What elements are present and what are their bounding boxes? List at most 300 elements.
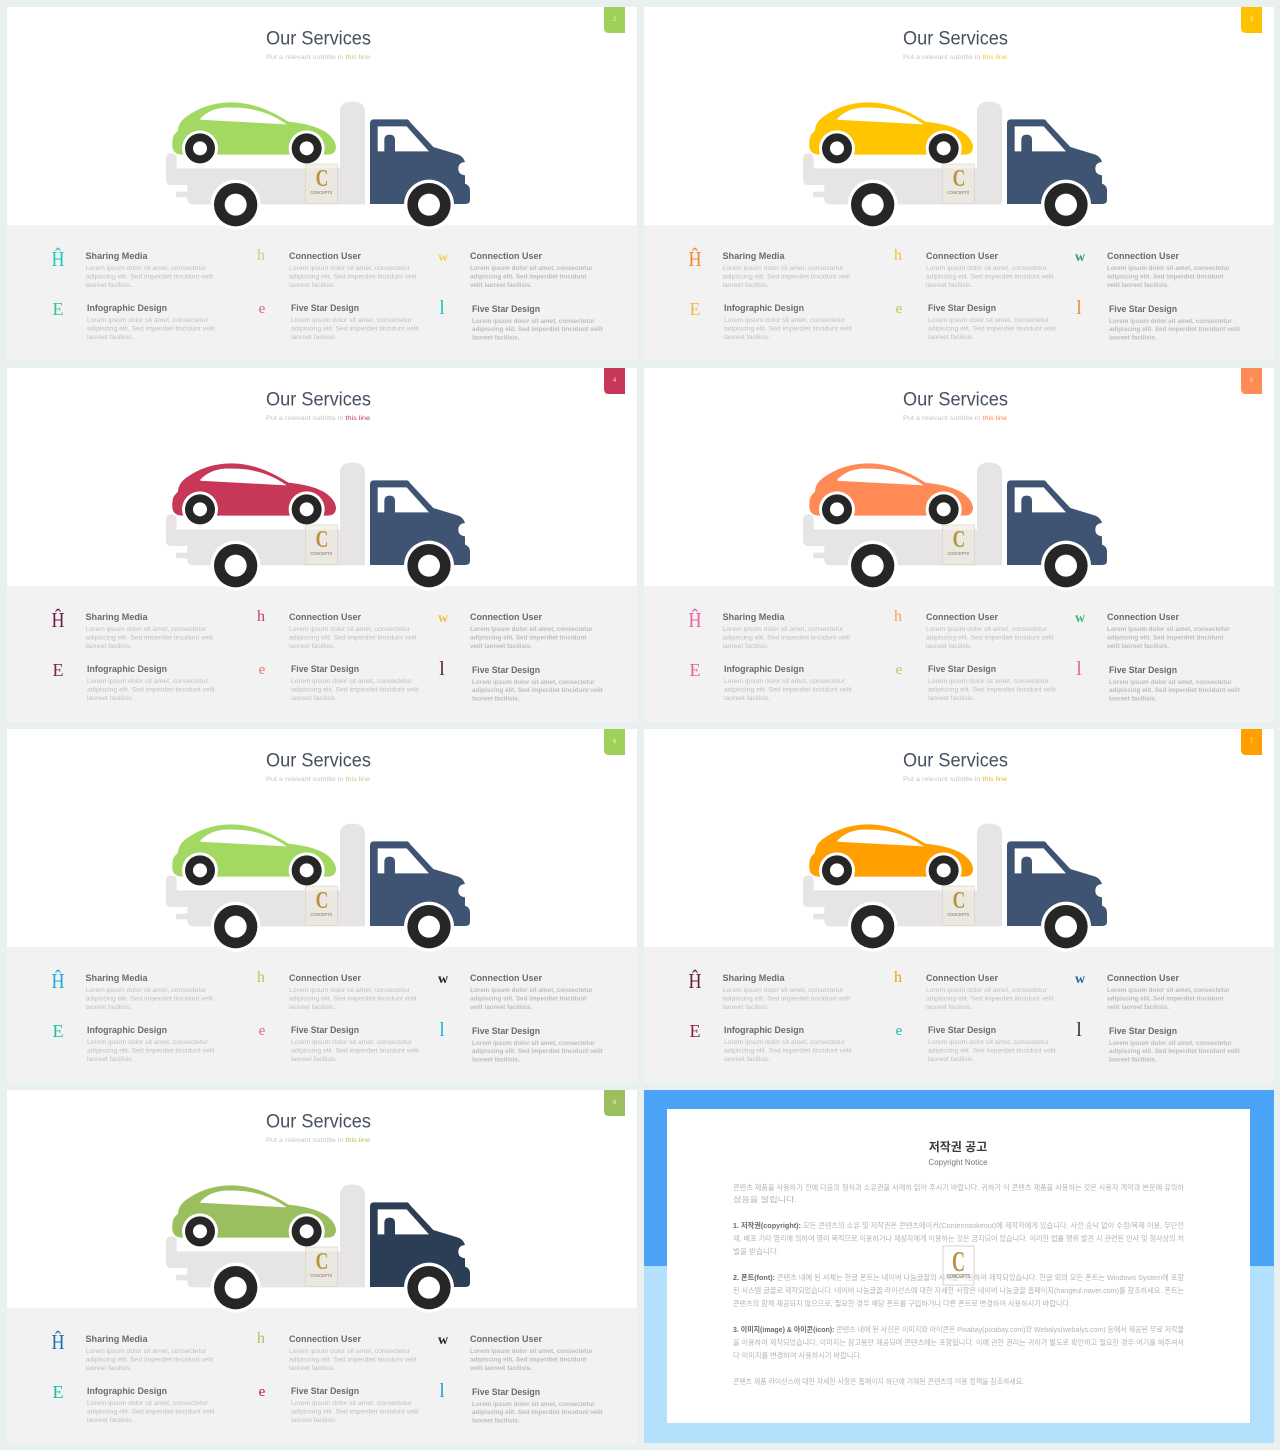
service: Connection User right: Lorem ipsum dolor sit amet, consectetur <box>470 265 593 272</box>
service: Connection User right: Lorem ipsum dolor sit amet, consectetur <box>1107 626 1230 633</box>
service: Connection User right: Lorem ipsum dolor sit amet, consectetur <box>1107 265 1230 272</box>
service: Sharing Media: Sharing Media <box>722 251 785 261</box>
service: Sharing Media: adipiscing elit. Sed imperdiet tincidunt velit <box>86 274 213 280</box>
service: Infographic Design: Infographic Design <box>87 1025 167 1035</box>
watermark logo <box>943 1246 974 1285</box>
service: Connection User: laoreet facilisis. <box>289 643 336 650</box>
page tab <box>1241 7 1262 33</box>
service: Sharing Media: laoreet facilisis. <box>722 643 769 650</box>
service: Connection User <box>257 608 417 650</box>
service: Connection User: h <box>894 247 902 264</box>
service: Sharing Media: Sharing Media <box>722 612 785 622</box>
tow truck illustration <box>803 463 1107 591</box>
notice body text: 된 시스템 글꼴로 제작되었습니다. 네이버 나눔글꼴 라이선스에 대한 자세한 사항은 네이버 나눔글꼴 홈페이지(hangeul.naver.com)를 참조하세요. 폰트는 <box>733 1285 1184 1295</box>
service: Sharing Media: Sharing Media <box>86 1334 148 1344</box>
service: Connection User right: adipiscing elit. Sed imperdiet tincidunt <box>1107 996 1224 1002</box>
service: Connection User: h <box>257 608 265 625</box>
service: Five Star Design right: l <box>1076 297 1082 319</box>
service: Five Star Design right: Lorem ipsum dolor sit amet, consectetur <box>1109 679 1232 686</box>
service: Infographic Design <box>52 1021 215 1063</box>
service: Sharing Media: adipiscing elit. Sed imperdiet tincidunt velit <box>722 634 850 642</box>
service: Connection User: Connection User <box>926 251 998 261</box>
service: Sharing Media: laoreet facilisis. <box>86 643 132 650</box>
service: Connection User right: Lorem ipsum dolor sit amet, consectetur <box>470 1348 593 1355</box>
service: Five Star Design: laoreet facilisis. <box>291 695 338 702</box>
service: Connection User right: velit laoreet facilisis. <box>470 643 532 650</box>
service: Connection User: h <box>257 1330 265 1347</box>
service: Sharing Media: Sharing Media <box>86 251 148 261</box>
service: Connection User: Connection User <box>926 612 998 622</box>
tow truck illustration: C <box>316 527 328 553</box>
service: Five Star Design right <box>1076 297 1241 342</box>
tow truck illustration <box>166 463 470 591</box>
service: Sharing Media: laoreet facilisis. <box>722 1004 769 1011</box>
service: Sharing Media: Lorem ipsum dolor sit amet, consectetur <box>722 626 844 633</box>
service: Infographic Design <box>52 660 215 702</box>
service: Sharing Media: Ĥ <box>52 247 64 271</box>
service: Connection User: laoreet facilisis. <box>926 1004 973 1011</box>
service: Connection User right: Connection User <box>470 612 542 622</box>
notice body text: 셨음을 알립니다. <box>733 1195 797 1204</box>
page tab <box>1241 368 1262 394</box>
service: Connection User: Connection User <box>289 612 361 622</box>
service: Connection User: Connection User <box>289 1334 361 1344</box>
service: Sharing Media: laoreet facilisis. <box>722 282 769 289</box>
page tab: 6 <box>613 739 617 745</box>
service: Connection User right: Connection User <box>1107 251 1179 261</box>
service: Connection User <box>894 969 1054 1011</box>
service: Five Star Design <box>896 1023 1056 1063</box>
service: Five Star Design right: l <box>1076 658 1082 680</box>
service: Connection User: laoreet facilisis. <box>289 1004 336 1011</box>
tow truck illustration: C <box>316 166 328 192</box>
service: Infographic Design <box>690 1021 852 1063</box>
service: Connection User <box>257 247 417 289</box>
tow truck illustration: CONCEPTS <box>947 912 970 918</box>
service: Five Star Design: laoreet facilisis. <box>928 1056 975 1063</box>
service: Five Star Design right: Lorem ipsum dolor sit amet, consectetur <box>472 1040 595 1047</box>
tow truck illustration: CONCEPTS <box>310 190 333 196</box>
service: Infographic Design: adipiscing elit. Sed imperdiet tincidunt velit <box>87 1408 215 1416</box>
tow truck illustration <box>166 102 470 230</box>
service: Connection User <box>894 247 1054 289</box>
service: Connection User: Lorem ipsum dolor sit amet, consectetur <box>289 987 411 994</box>
service: Five Star Design right: laoreet facilisis. <box>1109 334 1157 342</box>
subtitle: Put a relevant subtitle in this line <box>903 54 1007 61</box>
tow truck illustration: C <box>953 527 965 553</box>
service: Five Star Design right: adipiscing elit. Sed imperdiet tincidunt velit <box>472 326 604 333</box>
service: Infographic Design: adipiscing elit. Sed imperdiet tincidunt velit <box>87 686 215 694</box>
service: Connection User right: velit laoreet facilisis. <box>1107 282 1169 289</box>
service: Five Star Design right: Five Star Design <box>472 665 540 675</box>
page tab <box>604 1090 625 1116</box>
service: Infographic Design: E <box>52 299 64 319</box>
notice body text: 을 이용하여 제작되었습니다. 이미지는 참고용만 제공되며 콘텐츠에는 포함됩니다. 이에 관한 권리는 귀하가 별도로 확인하고 필요한 경우 여기를 해주셔서 <box>733 1337 1184 1347</box>
tow truck illustration: CONCEPTS <box>310 1273 333 1279</box>
page tab: 5 <box>1250 378 1254 384</box>
service: Five Star Design: Lorem ipsum dolor sit amet, consectetur <box>928 678 1050 685</box>
tow truck illustration: C <box>953 166 965 192</box>
page tab <box>1241 729 1262 755</box>
service: Connection User right <box>1075 250 1230 289</box>
service: Five Star Design: e <box>896 301 903 317</box>
title: Our Services <box>266 1110 371 1132</box>
service: Infographic Design <box>52 1382 215 1424</box>
service: Sharing Media: adipiscing elit. Sed imperdiet tincidunt velit <box>722 996 850 1002</box>
tow truck illustration <box>803 824 1107 952</box>
service: Five Star Design: e <box>259 1384 266 1400</box>
service: Sharing Media <box>688 608 850 650</box>
service: Five Star Design: Lorem ipsum dolor sit amet, consectetur <box>291 1039 413 1046</box>
service: Connection User: Lorem ipsum dolor sit amet, consectetur <box>926 265 1048 272</box>
service: Connection User: Connection User <box>289 973 361 983</box>
service: Infographic Design: laoreet facilisis. <box>87 695 134 702</box>
title: Our Services <box>903 750 1008 772</box>
slide: crimson car, page 4 <box>7 368 637 722</box>
service: Sharing Media <box>52 969 213 1011</box>
service: Sharing Media: adipiscing elit. Sed imperdiet tincidunt velit <box>86 634 213 642</box>
service: Connection User right: adipiscing elit. Sed imperdiet tincidunt <box>470 634 587 642</box>
service: Connection User right: w <box>1075 611 1086 626</box>
slide: olive car, page 8 <box>7 1090 637 1444</box>
page tab <box>604 368 625 394</box>
service: Connection User right: velit laoreet facilisis. <box>470 1004 532 1011</box>
service: Infographic Design: Lorem ipsum dolor sit amet, consectetur <box>87 317 209 324</box>
service: Sharing Media: Lorem ipsum dolor sit amet, consectetur <box>86 626 207 633</box>
service: Connection User right: Connection User <box>470 1334 542 1344</box>
service: Connection User <box>257 969 417 1011</box>
service: Sharing Media: Lorem ipsum dolor sit amet, consectetur <box>86 1348 207 1355</box>
service: Five Star Design: laoreet facilisis. <box>291 334 338 341</box>
service: Five Star Design: adipiscing elit. Sed imperdiet tincidunt velit <box>291 686 419 694</box>
service: Infographic Design: laoreet facilisis. <box>87 1056 134 1063</box>
service: Sharing Media: laoreet facilisis. <box>86 1365 132 1372</box>
service: Infographic Design: Infographic Design <box>724 664 804 674</box>
service: Five Star Design right: Lorem ipsum dolor sit amet, consectetur <box>1109 1040 1232 1047</box>
service: Sharing Media: Lorem ipsum dolor sit amet, consectetur <box>86 265 207 272</box>
service: Sharing Media: adipiscing elit. Sed imperdiet tincidunt velit <box>722 274 850 280</box>
service: Sharing Media: Sharing Media <box>86 612 148 622</box>
service: Five Star Design right: l <box>439 658 445 680</box>
service: Connection User right: adipiscing elit. Sed imperdiet tincidunt <box>470 1356 587 1364</box>
service: Five Star Design right <box>439 1380 604 1424</box>
service: Five Star Design: Lorem ipsum dolor sit amet, consectetur <box>291 317 413 324</box>
service: Connection User right: Connection User <box>1107 973 1179 983</box>
service: Sharing Media: Ĥ <box>52 969 64 993</box>
tow truck illustration: C <box>953 888 965 914</box>
service: Five Star Design right: Lorem ipsum dolor sit amet, consectetur <box>472 318 595 325</box>
slide: yellow car, page 3 <box>644 7 1274 361</box>
service: Five Star Design: Lorem ipsum dolor sit amet, consectetur <box>928 1039 1050 1046</box>
title: Our Services <box>903 28 1008 50</box>
notice heading: 저작권 공고 <box>929 1139 987 1154</box>
service: Infographic Design: laoreet facilisis. <box>724 334 771 341</box>
notice subheading: Copyright Notice <box>928 1158 988 1167</box>
service: Infographic Design: Lorem ipsum dolor sit amet, consectetur <box>724 317 846 324</box>
service: Connection User: laoreet facilisis. <box>926 282 973 289</box>
service: Five Star Design: Five Star Design <box>928 664 996 674</box>
service: Connection User right <box>438 972 593 1011</box>
service: Five Star Design right: Lorem ipsum dolor sit amet, consectetur <box>472 679 595 686</box>
service: Connection User right: adipiscing elit. Sed imperdiet tincidunt <box>1107 274 1224 280</box>
service: Infographic Design: Infographic Design <box>87 303 167 313</box>
title: Our Services <box>266 28 371 50</box>
service: Five Star Design: adipiscing elit. Sed imperdiet tincidunt velit <box>928 326 1056 332</box>
title: Our Services <box>266 388 371 410</box>
service: Five Star Design right: laoreet facilisis. <box>1109 1056 1157 1064</box>
service: Five Star Design: laoreet facilisis. <box>928 334 975 341</box>
service: Infographic Design: adipiscing elit. Sed imperdiet tincidunt velit <box>724 326 852 332</box>
service: Five Star Design right: Five Star Design <box>472 304 540 314</box>
watermark logo: C <box>952 1246 965 1278</box>
service: Five Star Design right: Five Star Design <box>472 1026 540 1036</box>
service: Five Star Design: laoreet facilisis. <box>291 1056 338 1063</box>
service: Connection User right <box>1075 972 1230 1011</box>
service: Infographic Design: E <box>52 1382 64 1402</box>
service: Connection User: adipiscing elit. Sed imperdiet tincidunt velit <box>926 634 1054 642</box>
service: Connection User: adipiscing elit. Sed imperdiet tincidunt velit <box>289 634 417 642</box>
service: Five Star Design right <box>439 658 604 702</box>
service: Connection User: laoreet facilisis. <box>289 1365 336 1372</box>
service: Connection User right: velit laoreet facilisis. <box>1107 643 1169 650</box>
service: Five Star Design <box>896 301 1056 341</box>
service: Five Star Design: e <box>896 662 903 678</box>
service: Connection User: laoreet facilisis. <box>289 282 336 289</box>
service: Five Star Design: laoreet facilisis. <box>291 1417 338 1424</box>
page tab <box>604 7 625 33</box>
service: Connection User: h <box>894 608 902 625</box>
service: Infographic Design: adipiscing elit. Sed imperdiet tincidunt velit <box>87 1048 215 1054</box>
notice body text: 콘텐츠 제품 라이선스에 대한 자세한 사항은 홈페이지 하단에 기재된 콘텐츠의 이용 정책을 참조하세요. <box>733 1376 1024 1386</box>
tow truck illustration: C <box>316 888 328 914</box>
service: Infographic Design: Infographic Design <box>724 1025 804 1035</box>
service: Connection User: Lorem ipsum dolor sit amet, consectetur <box>926 626 1048 633</box>
service: Sharing Media <box>688 247 850 289</box>
service: Five Star Design right: adipiscing elit. Sed imperdiet tincidunt velit <box>1109 326 1241 333</box>
service: Connection User right: w <box>1075 250 1086 265</box>
service: Connection User right: Connection User <box>1107 612 1179 622</box>
service: Five Star Design right <box>439 1019 604 1064</box>
service: Connection User: Lorem ipsum dolor sit amet, consectetur <box>289 265 411 272</box>
slide: coral car, page 5 <box>644 368 1274 722</box>
service: Connection User: h <box>257 969 265 986</box>
page tab: 4 <box>613 378 617 384</box>
subtitle: Put a relevant subtitle in this line <box>266 1137 370 1144</box>
service: Five Star Design right: l <box>439 1019 445 1041</box>
service: Infographic Design: Lorem ipsum dolor sit amet, consectetur <box>87 1039 209 1046</box>
service: Infographic Design: E <box>52 1021 64 1041</box>
notice body text <box>733 1182 1184 1386</box>
service: Five Star Design right: adipiscing elit. Sed imperdiet tincidunt velit <box>1109 1048 1241 1055</box>
service: Five Star Design right: laoreet facilisis. <box>472 1418 520 1424</box>
service: Infographic Design: E <box>52 660 64 680</box>
service: Sharing Media: Sharing Media <box>86 973 148 983</box>
service: Five Star Design: adipiscing elit. Sed imperdiet tincidunt velit <box>291 326 419 332</box>
service: Sharing Media: laoreet facilisis. <box>86 282 132 289</box>
service: Connection User right: Lorem ipsum dolor sit amet, consectetur <box>1107 987 1230 994</box>
service: Five Star Design right <box>439 297 604 342</box>
tow truck illustration: CONCEPTS <box>947 551 970 557</box>
service: Five Star Design <box>259 1384 419 1424</box>
service: Five Star Design: Five Star Design <box>291 1386 359 1396</box>
service: Five Star Design right <box>1076 1019 1241 1064</box>
subtitle: Put a relevant subtitle in this line <box>903 776 1007 783</box>
service: Connection User right: Lorem ipsum dolor sit amet, consectetur <box>470 626 593 633</box>
service: Connection User right: adipiscing elit. Sed imperdiet tincidunt <box>1107 634 1224 642</box>
service: Connection User right <box>438 1333 593 1372</box>
service: Sharing Media: Lorem ipsum dolor sit amet, consectetur <box>722 265 844 272</box>
service: Five Star Design right: adipiscing elit. Sed imperdiet tincidunt velit <box>1109 687 1241 694</box>
service: Connection User: Connection User <box>926 973 998 983</box>
service: Five Star Design right: Five Star Design <box>472 1387 540 1397</box>
service: Five Star Design: Five Star Design <box>291 1025 359 1035</box>
service: Sharing Media: Ĥ <box>688 247 702 271</box>
service: Five Star Design: adipiscing elit. Sed imperdiet tincidunt velit <box>291 1048 419 1054</box>
service: Connection User: h <box>257 247 265 264</box>
service: Connection User: adipiscing elit. Sed imperdiet tincidunt velit <box>289 996 417 1002</box>
service: Connection User right: Connection User <box>470 251 542 261</box>
service: Connection User right: velit laoreet facilisis. <box>1107 1004 1169 1011</box>
tow truck illustration <box>803 102 1107 230</box>
service: Infographic Design: laoreet facilisis. <box>87 1417 134 1424</box>
service: Five Star Design: Five Star Design <box>291 303 359 313</box>
service: Five Star Design: e <box>259 662 266 678</box>
service: Sharing Media <box>52 608 213 650</box>
service: Connection User right: w <box>1075 972 1086 987</box>
service: Five Star Design: Lorem ipsum dolor sit amet, consectetur <box>291 1400 413 1407</box>
service: Connection User right <box>438 611 593 650</box>
service: Connection User right: velit laoreet facilisis. <box>470 282 532 289</box>
service: Infographic Design: laoreet facilisis. <box>724 1056 771 1063</box>
service: Five Star Design right: adipiscing elit. Sed imperdiet tincidunt velit <box>472 687 604 694</box>
subtitle: Put a relevant subtitle in this line <box>903 415 1007 422</box>
service: Connection User: Lorem ipsum dolor sit amet, consectetur <box>289 1348 411 1355</box>
service: Infographic Design: Infographic Design <box>87 664 167 674</box>
service: Connection User: Lorem ipsum dolor sit amet, consectetur <box>289 626 411 633</box>
service: Infographic Design: Lorem ipsum dolor sit amet, consectetur <box>724 678 846 685</box>
service: Infographic Design: adipiscing elit. Sed imperdiet tincidunt velit <box>87 326 215 332</box>
service: Infographic Design: Infographic Design <box>87 1386 167 1396</box>
page tab: 7 <box>1250 739 1254 745</box>
subtitle: Put a relevant subtitle in this line <box>266 776 370 783</box>
service: Five Star Design: e <box>259 301 266 317</box>
service: Sharing Media: Ĥ <box>52 608 64 632</box>
service: Sharing Media: Lorem ipsum dolor sit amet, consectetur <box>722 987 844 994</box>
notice body text: 벌을 받습니다. <box>733 1246 779 1256</box>
service: Five Star Design: Five Star Design <box>928 303 996 313</box>
service: Connection User <box>257 1330 417 1372</box>
service: Five Star Design: laoreet facilisis. <box>928 695 975 702</box>
service: Sharing Media: Ĥ <box>52 1330 64 1354</box>
notice body text: 2. 폰트(font): 콘텐츠 내에 된 서체는 한글 폰트는 네이버 나눔글꼴의 서체를 이용하여 제작되었습니다. 한글 외의 모든 폰트는 Windows System에 포함 <box>733 1272 1184 1282</box>
slide: green car, page 2 <box>7 7 637 361</box>
service: Connection User right <box>1075 611 1230 650</box>
service: Five Star Design: Lorem ipsum dolor sit amet, consectetur <box>928 317 1050 324</box>
watermark logo: CONCEPTS <box>947 1274 971 1280</box>
service: Infographic Design <box>52 299 215 341</box>
service: Infographic Design: Lorem ipsum dolor sit amet, consectetur <box>87 678 209 685</box>
service: Five Star Design <box>259 301 419 341</box>
service: Infographic Design: adipiscing elit. Sed imperdiet tincidunt velit <box>724 1048 852 1054</box>
service: Infographic Design: E <box>690 1021 700 1041</box>
service: Infographic Design: Lorem ipsum dolor sit amet, consectetur <box>87 1400 209 1407</box>
tow truck illustration: C <box>316 1249 328 1275</box>
page tab: 2 <box>613 17 617 23</box>
service: Five Star Design right: l <box>439 297 445 319</box>
service: Connection User right: w <box>438 1333 449 1348</box>
service: Connection User: adipiscing elit. Sed imperdiet tincidunt velit <box>926 996 1054 1002</box>
panel: copyright notice <box>644 1090 1274 1443</box>
service: Sharing Media: adipiscing elit. Sed imperdiet tincidunt velit <box>86 996 213 1002</box>
service: Connection User: laoreet facilisis. <box>926 643 973 650</box>
tow truck illustration <box>166 824 470 952</box>
service: Five Star Design: e <box>259 1023 266 1039</box>
service: Sharing Media <box>52 1330 213 1372</box>
service: Five Star Design right: Lorem ipsum dolor sit amet, consectetur <box>472 1401 595 1408</box>
title: Our Services <box>266 750 371 772</box>
service: Sharing Media: Ĥ <box>688 608 702 632</box>
service: Infographic Design: E <box>690 660 700 680</box>
service: Five Star Design right: laoreet facilisis. <box>1109 696 1157 702</box>
service: Five Star Design right: Five Star Design <box>1109 1026 1177 1036</box>
service: Five Star Design right: laoreet facilisis. <box>472 1056 520 1064</box>
service: Infographic Design: laoreet facilisis. <box>724 695 771 702</box>
service: Five Star Design right: Five Star Design <box>1109 665 1177 675</box>
service: Five Star Design <box>259 1023 419 1063</box>
service: Five Star Design: adipiscing elit. Sed imperdiet tincidunt velit <box>928 1048 1056 1054</box>
page tab: 8 <box>613 1100 617 1106</box>
service: Infographic Design <box>690 660 852 702</box>
slide: orange car, page 7 <box>644 729 1274 1083</box>
service: Sharing Media: laoreet facilisis. <box>86 1004 132 1011</box>
notice body text: 콘텐츠의 함께 제공되지 않으므로, 필요한 경우 해당 폰트를 구입하거나 다른 폰트로 변경하여 사용하시기 바랍니다. <box>733 1298 1071 1308</box>
service: Sharing Media <box>688 969 850 1011</box>
service: Infographic Design <box>690 299 852 341</box>
service: Connection User: Connection User <box>289 251 361 261</box>
service: Connection User right: adipiscing elit. Sed imperdiet tincidunt <box>470 996 587 1002</box>
service: Five Star Design: adipiscing elit. Sed imperdiet tincidunt velit <box>928 686 1056 694</box>
notice body text: 콘텐츠 제품을 사용하기 전에 다음의 형식과 소유권을 사례히 읽어 주시기 바랍니다. 귀하가 이 콘텐츠 제품을 사용하는 것은 사용자 계약과 본문에 유의하 <box>733 1182 1184 1192</box>
page tab <box>604 729 625 755</box>
subtitle: Put a relevant subtitle in this line <box>266 415 370 422</box>
service: Connection User right <box>438 250 593 289</box>
service: Sharing Media: Sharing Media <box>722 973 785 983</box>
page tab: 3 <box>1250 17 1254 23</box>
tow truck illustration <box>166 1185 470 1313</box>
service: Infographic Design: Infographic Design <box>724 303 804 313</box>
service: Infographic Design: adipiscing elit. Sed imperdiet tincidunt velit <box>724 686 852 694</box>
service: Connection User right: Lorem ipsum dolor sit amet, consectetur <box>470 987 593 994</box>
tow truck illustration: CONCEPTS <box>310 912 333 918</box>
subtitle: Put a relevant subtitle in this line <box>266 54 370 61</box>
service: Infographic Design: Lorem ipsum dolor sit amet, consectetur <box>724 1039 846 1046</box>
service: Connection User: adipiscing elit. Sed imperdiet tincidunt velit <box>289 274 417 280</box>
service: Five Star Design right: l <box>439 1380 445 1402</box>
service: Infographic Design: E <box>690 299 700 319</box>
service: Sharing Media: adipiscing elit. Sed imperdiet tincidunt velit <box>86 1356 213 1364</box>
service: Sharing Media: Lorem ipsum dolor sit amet, consectetur <box>86 987 207 994</box>
slide: green car, page 6 <box>7 729 637 1083</box>
service: Connection User right: w <box>438 250 449 265</box>
service: Five Star Design right: Lorem ipsum dolor sit amet, consectetur <box>1109 318 1232 325</box>
service: Five Star Design: adipiscing elit. Sed imperdiet tincidunt velit <box>291 1408 419 1416</box>
service: Connection User right: w <box>438 972 449 987</box>
notice body text: 3. 이미지(image) & 아이콘(icon): 콘텐츠 내에 된 사진은 이미지와 아이콘은 Pixabay(pixabay.com)와 Webalys(webalys.com) 등에서 제공된 무료 저작물 <box>733 1324 1184 1334</box>
service: Five Star Design <box>259 662 419 702</box>
notice body text: 재, 배포 기타 영리에 의하여 영리 목적으로 이용하거나 제삼자에게 이용하는 것은 금지되어 있습니다. 이러한 법률 행위 발견 시 관련된 민사 및 형사상의 처 <box>733 1233 1184 1243</box>
notice body text: 다 이미지를 변경하여 사용하시기 바랍니다. <box>733 1350 862 1360</box>
service: Sharing Media: Ĥ <box>688 969 702 993</box>
